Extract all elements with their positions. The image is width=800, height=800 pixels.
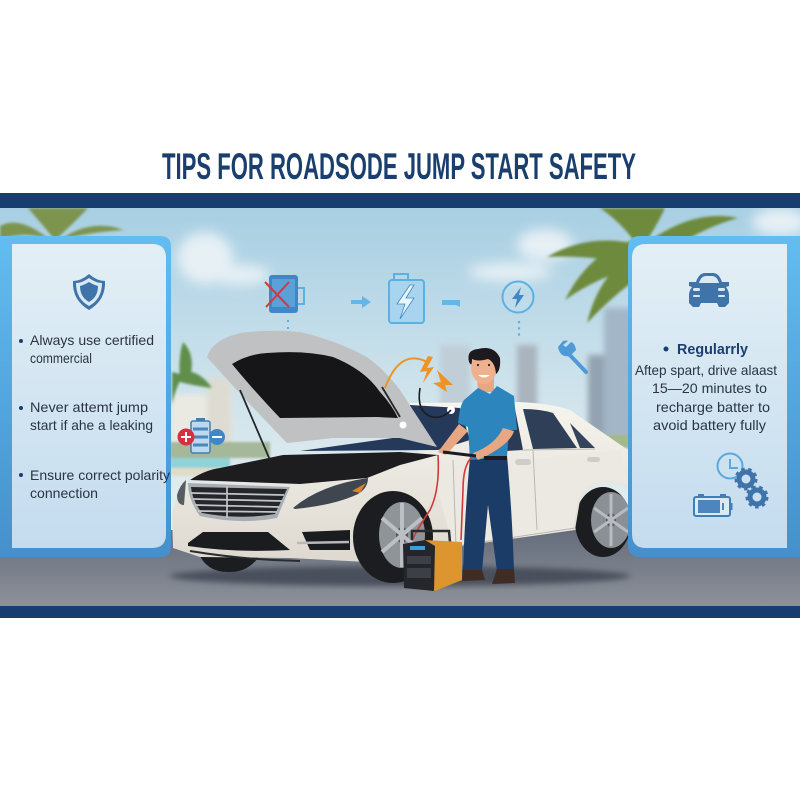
hood strut right bbox=[382, 387, 400, 417]
arrow: mug to battery bbox=[351, 296, 371, 308]
front left tyre bbox=[198, 552, 262, 572]
icon: battery polarity bbox=[178, 418, 225, 453]
car shadow bbox=[170, 566, 630, 586]
jump starter unit bbox=[403, 531, 462, 591]
black cable arc bbox=[419, 388, 451, 417]
door seams and handles bbox=[453, 449, 595, 547]
hair bbox=[468, 348, 500, 374]
hood underside bbox=[232, 352, 398, 418]
clouds bbox=[177, 208, 800, 285]
rear quarter window bbox=[570, 423, 595, 448]
engine bay bbox=[190, 452, 438, 484]
windshield bbox=[300, 405, 470, 451]
belt bbox=[484, 456, 507, 460]
fog light intake bbox=[302, 530, 350, 550]
bottom navy band bbox=[0, 606, 800, 618]
shoreline and water bbox=[170, 435, 640, 476]
text: rule 2: Never attemt jump bbox=[30, 399, 148, 415]
icon: clock bbox=[718, 454, 742, 478]
technician bbox=[438, 348, 517, 584]
text: rule 1: commercial bbox=[30, 350, 92, 366]
background scene bbox=[0, 208, 800, 606]
rear wheel bbox=[575, 487, 631, 557]
palm small bbox=[172, 342, 212, 405]
text: regularly heading: Regularrly bbox=[677, 341, 749, 358]
neck bbox=[477, 376, 494, 392]
icon: shield bbox=[73, 274, 105, 310]
clamp handles bbox=[443, 452, 476, 456]
trousers bbox=[463, 456, 514, 571]
palm left bbox=[0, 208, 124, 236]
panel: safety rules bbox=[0, 236, 171, 557]
icon: battery with bolt bbox=[389, 274, 424, 323]
text: rule 3: Ensure correct polarity bbox=[30, 467, 170, 483]
head bbox=[471, 350, 497, 384]
orange spark arc bbox=[385, 358, 427, 388]
icon: battery low bbox=[694, 494, 732, 516]
grille bbox=[188, 483, 290, 521]
text: rule 3: connection bbox=[30, 485, 98, 501]
red jumper cables bbox=[412, 455, 472, 540]
right arm bbox=[473, 428, 514, 460]
text: rule 1: Always use certified bbox=[30, 332, 154, 348]
car body bbox=[172, 402, 632, 562]
connector dots bbox=[518, 321, 520, 339]
icon: circled bolt bbox=[502, 282, 534, 312]
text: recharge advice: recharge batter to bbox=[656, 399, 770, 415]
shoes bbox=[462, 570, 485, 581]
left arm bbox=[438, 424, 468, 455]
text: recharge advice: Aftep spart, drive alaast bbox=[635, 362, 777, 378]
icon: mug crossed out bbox=[265, 275, 304, 313]
skyline buildings bbox=[172, 308, 634, 460]
headlight bbox=[293, 478, 368, 509]
rear door window bbox=[523, 409, 577, 449]
smile bbox=[478, 375, 490, 378]
car bbox=[172, 331, 632, 583]
text: recharge advice: 15—20 minutes to bbox=[652, 380, 767, 396]
hood lights bbox=[400, 422, 406, 428]
left side light bbox=[177, 480, 186, 505]
panel: after the start bbox=[628, 236, 800, 557]
text: recharge advice: avoid battery fully bbox=[653, 417, 766, 433]
shirt bbox=[458, 386, 517, 460]
text: rule 2 bbox=[19, 399, 153, 433]
hood strut left bbox=[240, 390, 270, 460]
text: rule 3 bbox=[19, 467, 170, 501]
text: rule 2: start if ahe a leaking bbox=[30, 417, 153, 433]
icon: lightning bolts bbox=[420, 356, 453, 392]
road bbox=[0, 530, 800, 606]
connector dots bbox=[287, 320, 289, 331]
door shading bbox=[432, 450, 628, 547]
icon: wrench bbox=[558, 340, 586, 372]
bumper intake bbox=[188, 532, 290, 551]
front wheel bbox=[353, 491, 433, 583]
open hood bbox=[207, 331, 437, 460]
arrow: dash bbox=[442, 300, 460, 307]
text: rule 1 bbox=[19, 332, 154, 366]
palm right bbox=[547, 208, 738, 323]
icon: car front bbox=[689, 273, 729, 307]
top navy band bbox=[0, 193, 800, 208]
lower lip bbox=[190, 551, 300, 561]
icon: gears bbox=[736, 469, 767, 507]
front side window bbox=[490, 409, 523, 452]
text: recharge advice bbox=[635, 362, 777, 433]
